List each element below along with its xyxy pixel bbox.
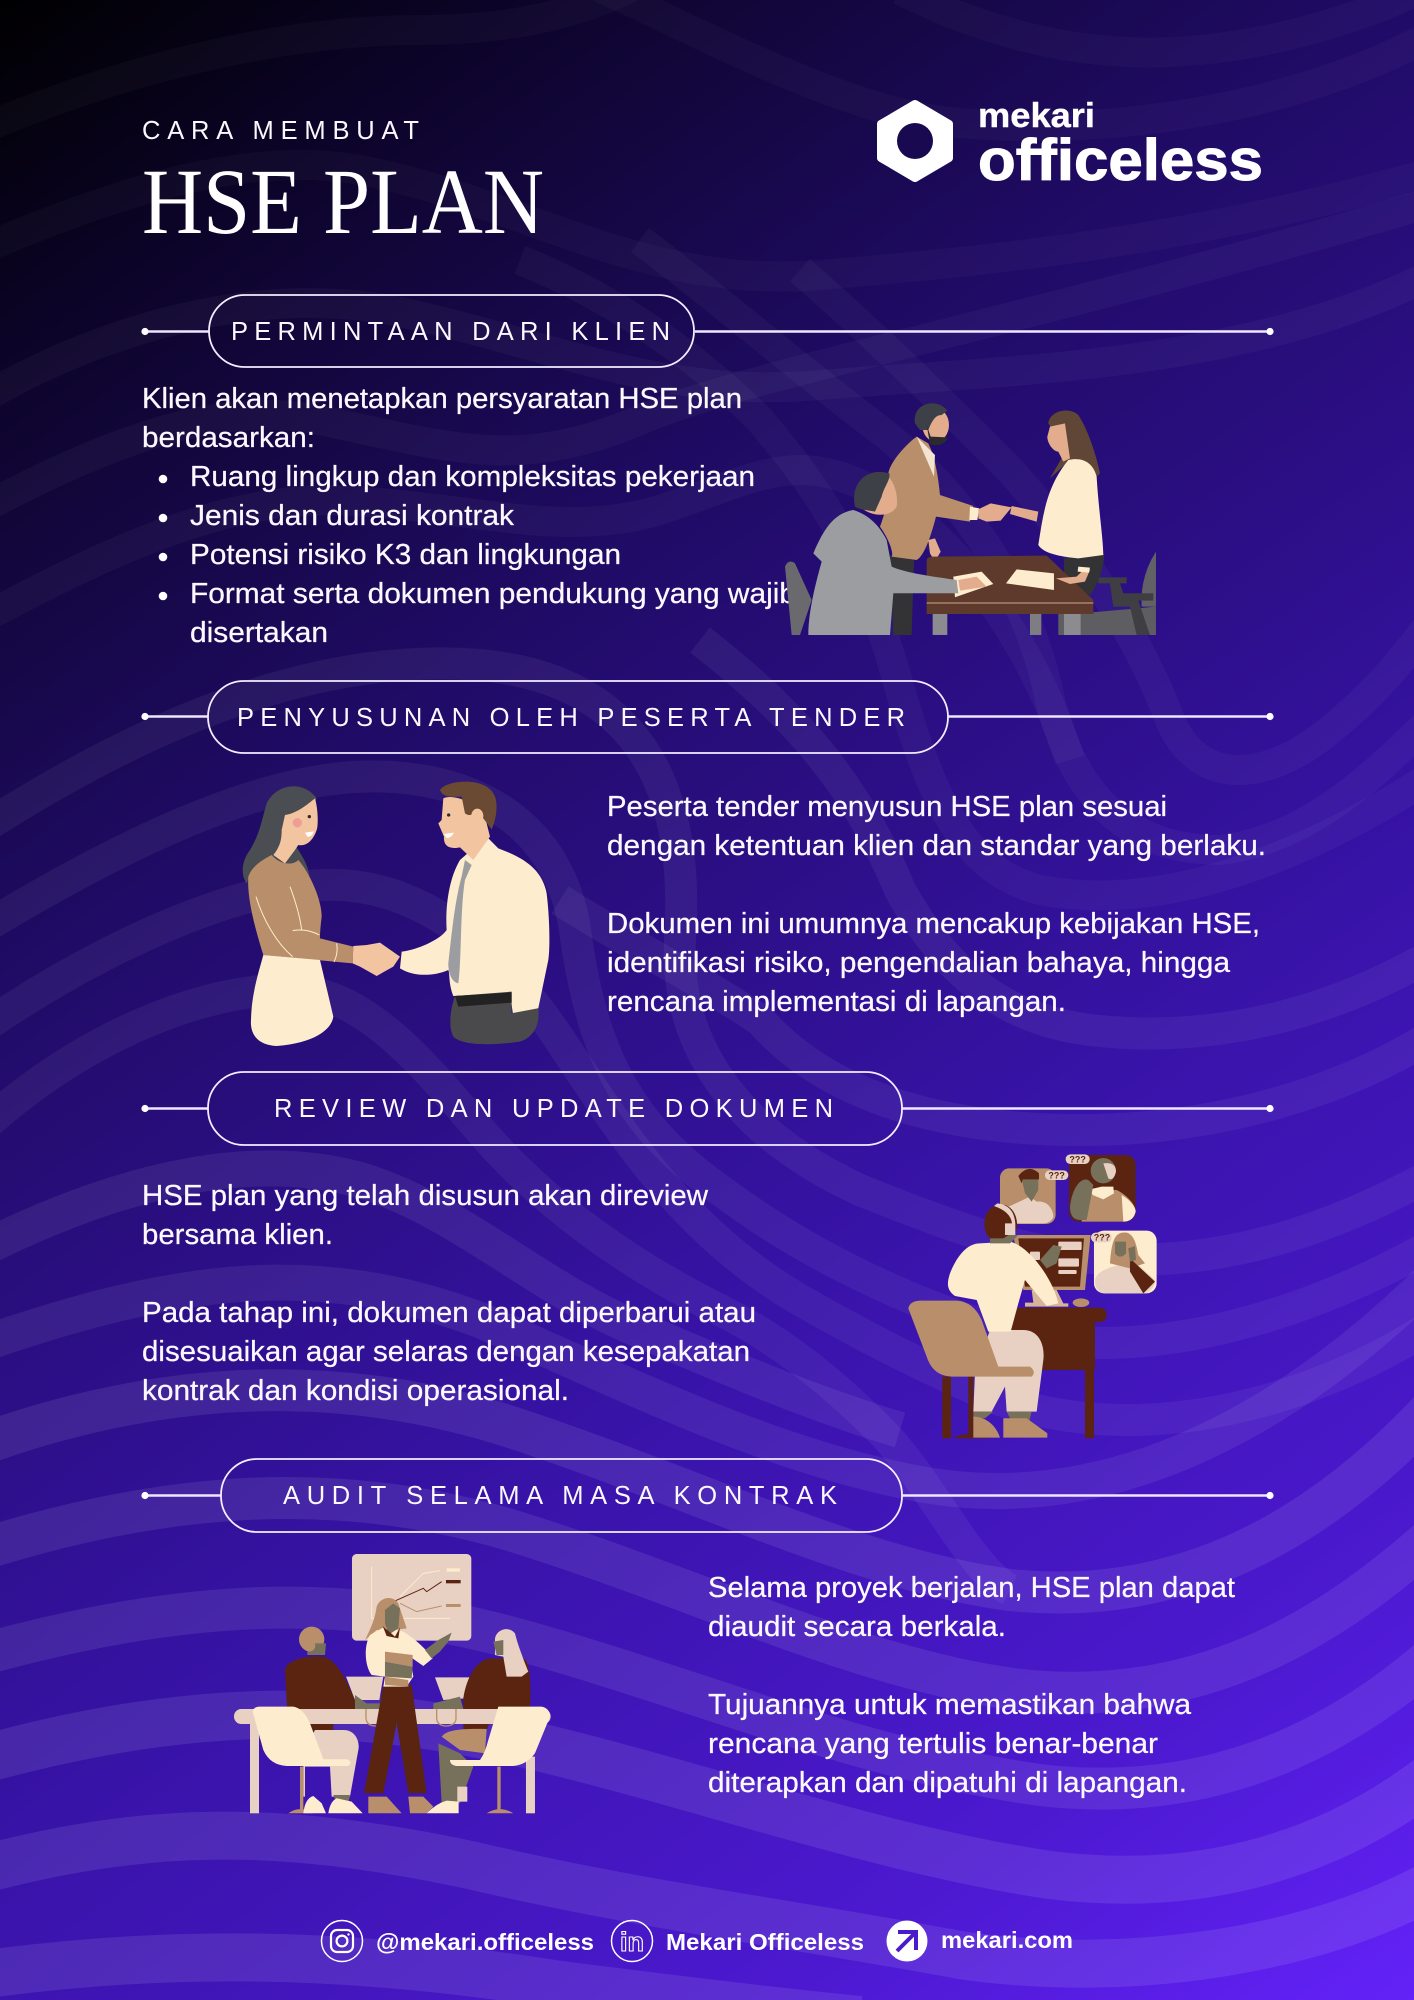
desk monitor bbox=[1013, 1235, 1091, 1307]
icon: hexagon logo mark bbox=[881, 104, 949, 178]
video tile: person one bbox=[1000, 1168, 1056, 1224]
section 4 text: rencana yang tertulis benar-benar bbox=[708, 1728, 1158, 1760]
section 3 text: Pada tahap ini, dokumen dapat diperbarui atau bbox=[142, 1297, 756, 1329]
section 2 header bbox=[141, 681, 1274, 753]
section 4 text: diterapkan dan dipatuhi di lapangan. bbox=[708, 1767, 1187, 1799]
section 2 text: Peserta tender menyusun HSE plan sesuai bbox=[607, 791, 1167, 823]
section 4 text: diaudit secara berkala. bbox=[708, 1611, 1006, 1643]
illustration: video call at desk bbox=[908, 1154, 1157, 1438]
section 3 text: bersama klien. bbox=[142, 1219, 333, 1251]
footer contacts bbox=[322, 1920, 1073, 1962]
illustration: two people shaking hands bbox=[243, 782, 549, 1046]
section 3 text: HSE plan yang telah disusun akan direview bbox=[142, 1180, 709, 1212]
presenter bbox=[364, 1598, 452, 1813]
heading: HSE PLAN: HSE PLAN bbox=[142, 151, 544, 254]
section 2 text: identifikasi risiko, pengendalian bahaya, hingga bbox=[607, 947, 1231, 979]
eyebrow: cara membuat: CARA MEMBUAT bbox=[142, 117, 419, 145]
website: mekari.com bbox=[941, 1927, 1073, 1953]
section 1 text: Format serta dokumen pendukung yang wajib bbox=[190, 578, 796, 610]
illustration: team presentation with chart board bbox=[234, 1554, 551, 1813]
section 3 header: REVIEW DAN UPDATE DOKUMEN bbox=[274, 1095, 833, 1123]
wordmark: mekari: mekari bbox=[978, 97, 1095, 135]
section 1 text: Potensi risiko K3 dan lingkungan bbox=[190, 539, 621, 571]
video tile: person two bbox=[1069, 1155, 1136, 1222]
speech bubbles with question marks: ??? bbox=[1069, 1154, 1086, 1164]
icon: linkedin bbox=[612, 1920, 652, 1962]
section 3 text: disesuaikan agar selaras dengan kesepakatan bbox=[142, 1336, 750, 1368]
logo: mekari officeless bbox=[881, 97, 1263, 193]
icon: website arrow bbox=[886, 1920, 928, 1962]
section 1 text bbox=[142, 383, 796, 649]
section 2 text bbox=[607, 791, 1266, 1018]
right colleague bbox=[433, 1629, 530, 1730]
seated person at desk bbox=[908, 1203, 1062, 1438]
section 1 text: berdasarkan: bbox=[142, 422, 315, 454]
left colleague bbox=[285, 1627, 390, 1732]
section 1 header: PERMINTAAN DARI KLIEN bbox=[231, 318, 670, 346]
section 2 text: Dokumen ini umumnya mencakup kebijakan HSE, bbox=[607, 908, 1260, 940]
icon: instagram bbox=[322, 1920, 362, 1962]
section 1 text: Jenis dan durasi kontrak bbox=[190, 500, 515, 532]
desk bbox=[942, 1308, 1107, 1438]
section 2 text: rencana implementasi di lapangan. bbox=[607, 986, 1066, 1018]
instagram handle: @mekari.officeless bbox=[376, 1929, 594, 1955]
section 4 text: Selama proyek berjalan, HSE plan dapat bbox=[708, 1572, 1235, 1604]
title block bbox=[142, 117, 544, 254]
icon: linkedin: in bbox=[620, 1927, 644, 1957]
section 2 text: dengan ketentuan klien dan standar yang berlaku. bbox=[607, 830, 1266, 862]
chairs and legs bbox=[253, 1707, 550, 1813]
section 3 header bbox=[141, 1072, 1274, 1145]
section 1 text: Ruang lingkup dan kompleksitas pekerjaan bbox=[190, 461, 755, 493]
section 2 header: PENYUSUNAN OLEH PESERTA TENDER bbox=[237, 704, 905, 732]
section 4 text: Tujuannya untuk memastikan bahwa bbox=[708, 1689, 1192, 1721]
section 3 text bbox=[142, 1180, 756, 1407]
video tile: person three bbox=[1094, 1231, 1157, 1293]
wordmark: officeless: officeless bbox=[978, 128, 1263, 193]
section 4 text bbox=[708, 1572, 1235, 1799]
section 3 text: kontrak dan kondisi operasional. bbox=[142, 1375, 569, 1407]
section 1 text: disertakan bbox=[190, 617, 328, 649]
chart board bbox=[352, 1554, 471, 1641]
linkedin name: Mekari Officeless bbox=[666, 1929, 864, 1955]
section 1 text: Klien akan menetapkan persyaratan HSE plan bbox=[142, 383, 742, 415]
illustration: client meeting handshake at table bbox=[785, 403, 1156, 635]
speech bubbles with question marks bbox=[1045, 1154, 1112, 1243]
speech bubbles with question marks: ??? bbox=[1048, 1170, 1065, 1180]
section 4 header bbox=[141, 1459, 1274, 1532]
section 1 header bbox=[141, 295, 1274, 367]
section 4 header: AUDIT SELAMA MASA KONTRAK bbox=[283, 1482, 837, 1510]
speech bubbles with question marks: ??? bbox=[1094, 1233, 1110, 1243]
